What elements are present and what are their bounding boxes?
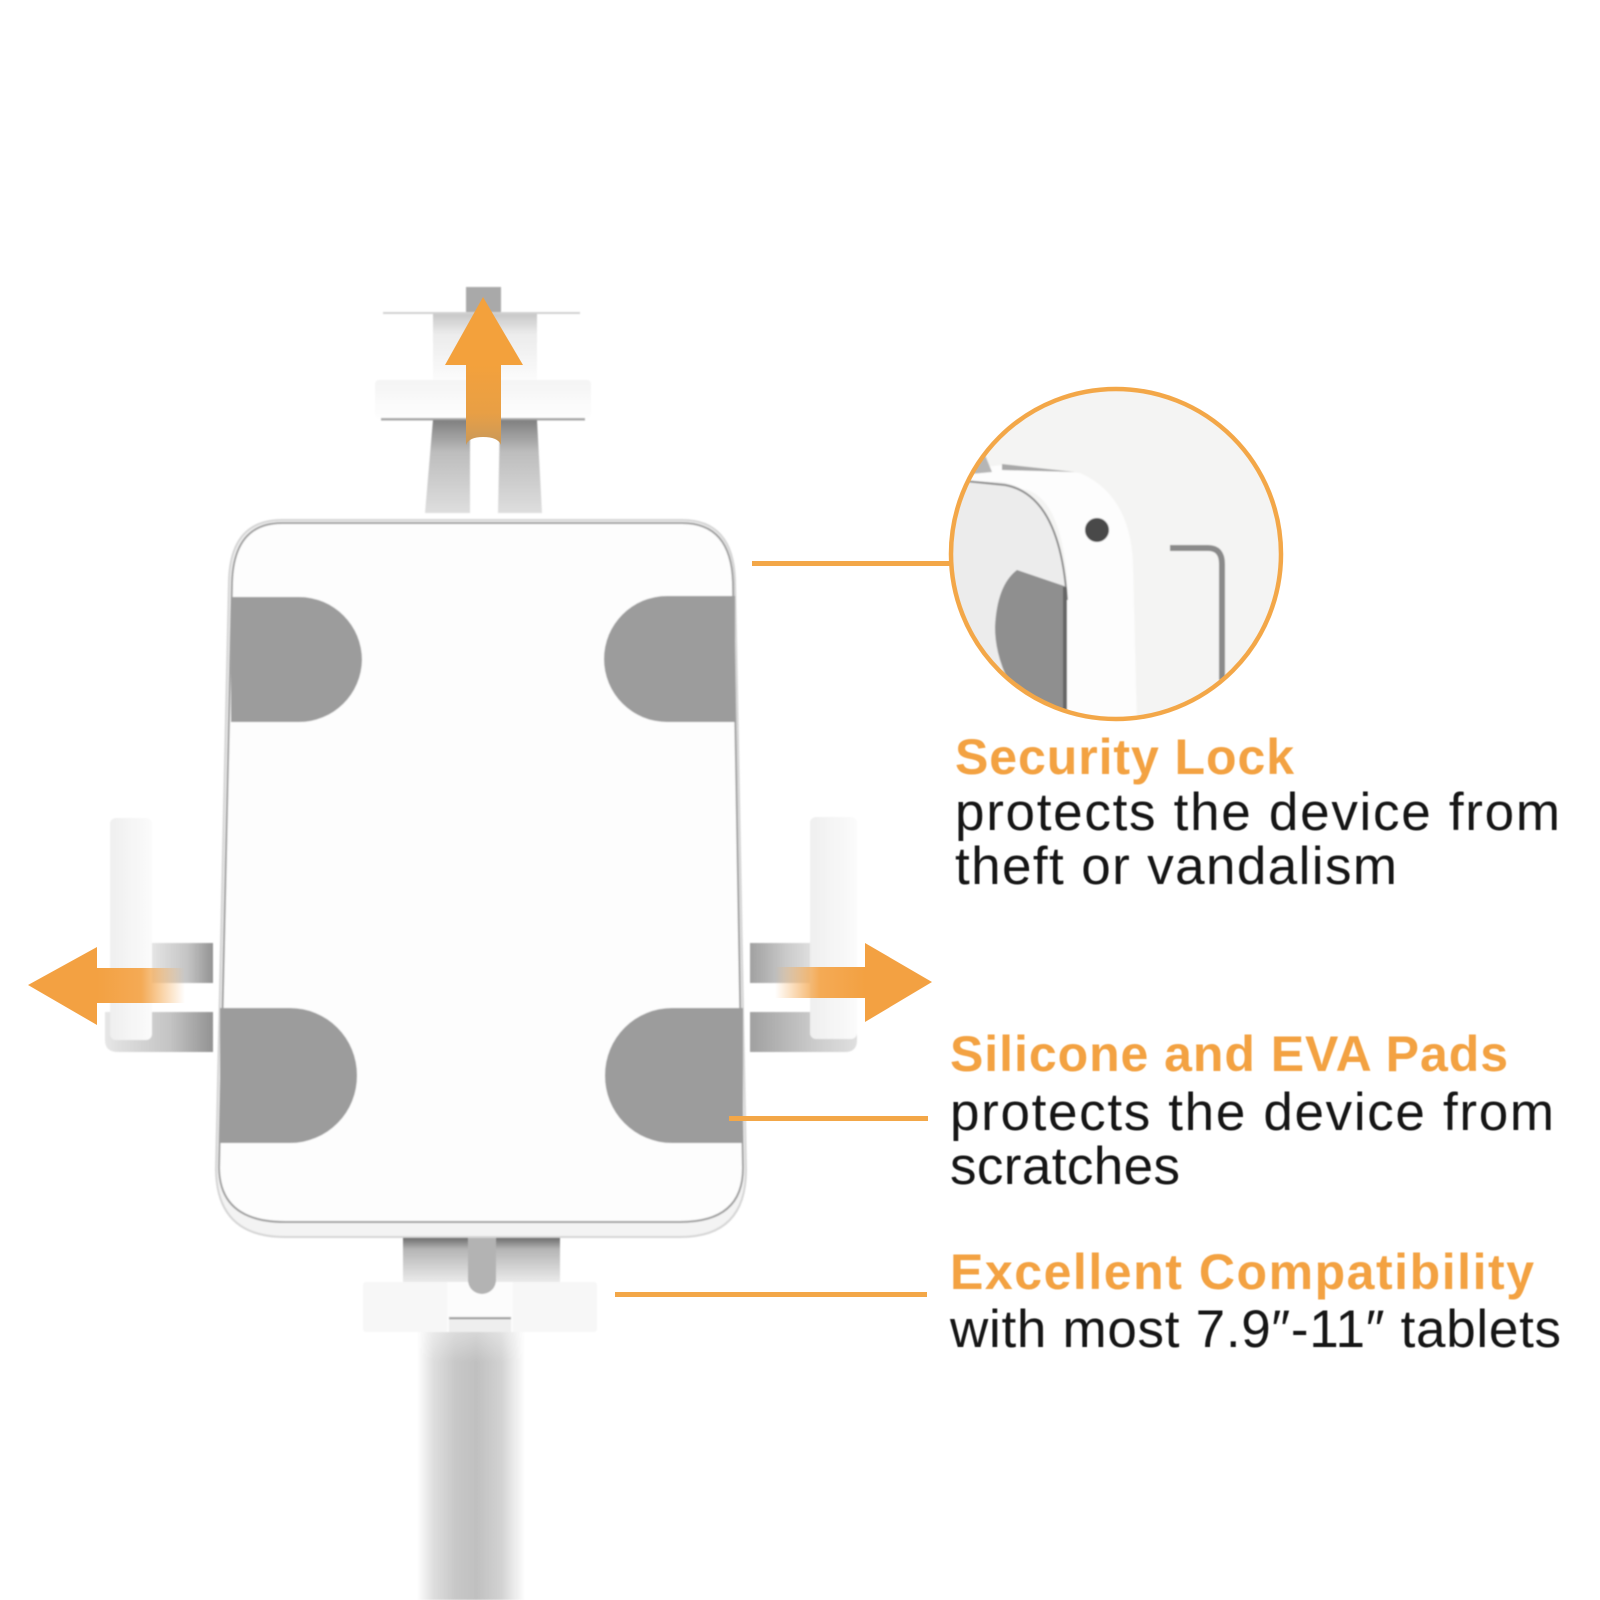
tablet holder product	[105, 287, 857, 1600]
leader line: compatibility	[615, 1292, 927, 1297]
tablet mounting panel	[216, 520, 746, 1237]
lens: lock hole	[1085, 518, 1109, 542]
text: silicone and EVA pads	[950, 1026, 1554, 1196]
pad bottom left	[220, 1008, 357, 1143]
text: security lock: Security Lock	[955, 729, 1294, 785]
leader line: security lock	[752, 561, 951, 566]
text: excellent compatibility	[949, 1244, 1561, 1359]
text: silicone and EVA pads: Silicone and EVA Pads	[950, 1026, 1508, 1082]
arrow: right	[775, 943, 932, 1022]
text: excellent compatibility: Excellent Compatibility	[950, 1244, 1534, 1300]
text: excellent compatibility: with most 7.9″-11″ tablets	[949, 1300, 1561, 1359]
pad top left	[231, 597, 362, 722]
arrow: left	[28, 947, 185, 1025]
left slider arm	[105, 818, 213, 1052]
text: silicone and EVA pads: scratches	[950, 1137, 1180, 1196]
text: security lock: protects the device from	[955, 783, 1560, 842]
pad bottom right	[605, 1008, 743, 1143]
callout lens: security lock close-up	[950, 388, 1284, 725]
top bracket	[375, 287, 591, 513]
right slider arm	[750, 817, 857, 1052]
leader line: pads	[729, 1116, 928, 1121]
arrow: up	[445, 297, 523, 445]
text: security lock	[955, 729, 1560, 896]
lens: grey pad	[995, 570, 1067, 715]
lens: holder frame	[972, 466, 1136, 716]
pad top right	[604, 596, 735, 722]
text: security lock: theft or vandalism	[955, 837, 1397, 896]
bottom bracket and pole	[363, 1235, 597, 1600]
text: silicone and EVA pads: protects the device from	[950, 1083, 1554, 1142]
lens: hex key	[1170, 548, 1222, 680]
